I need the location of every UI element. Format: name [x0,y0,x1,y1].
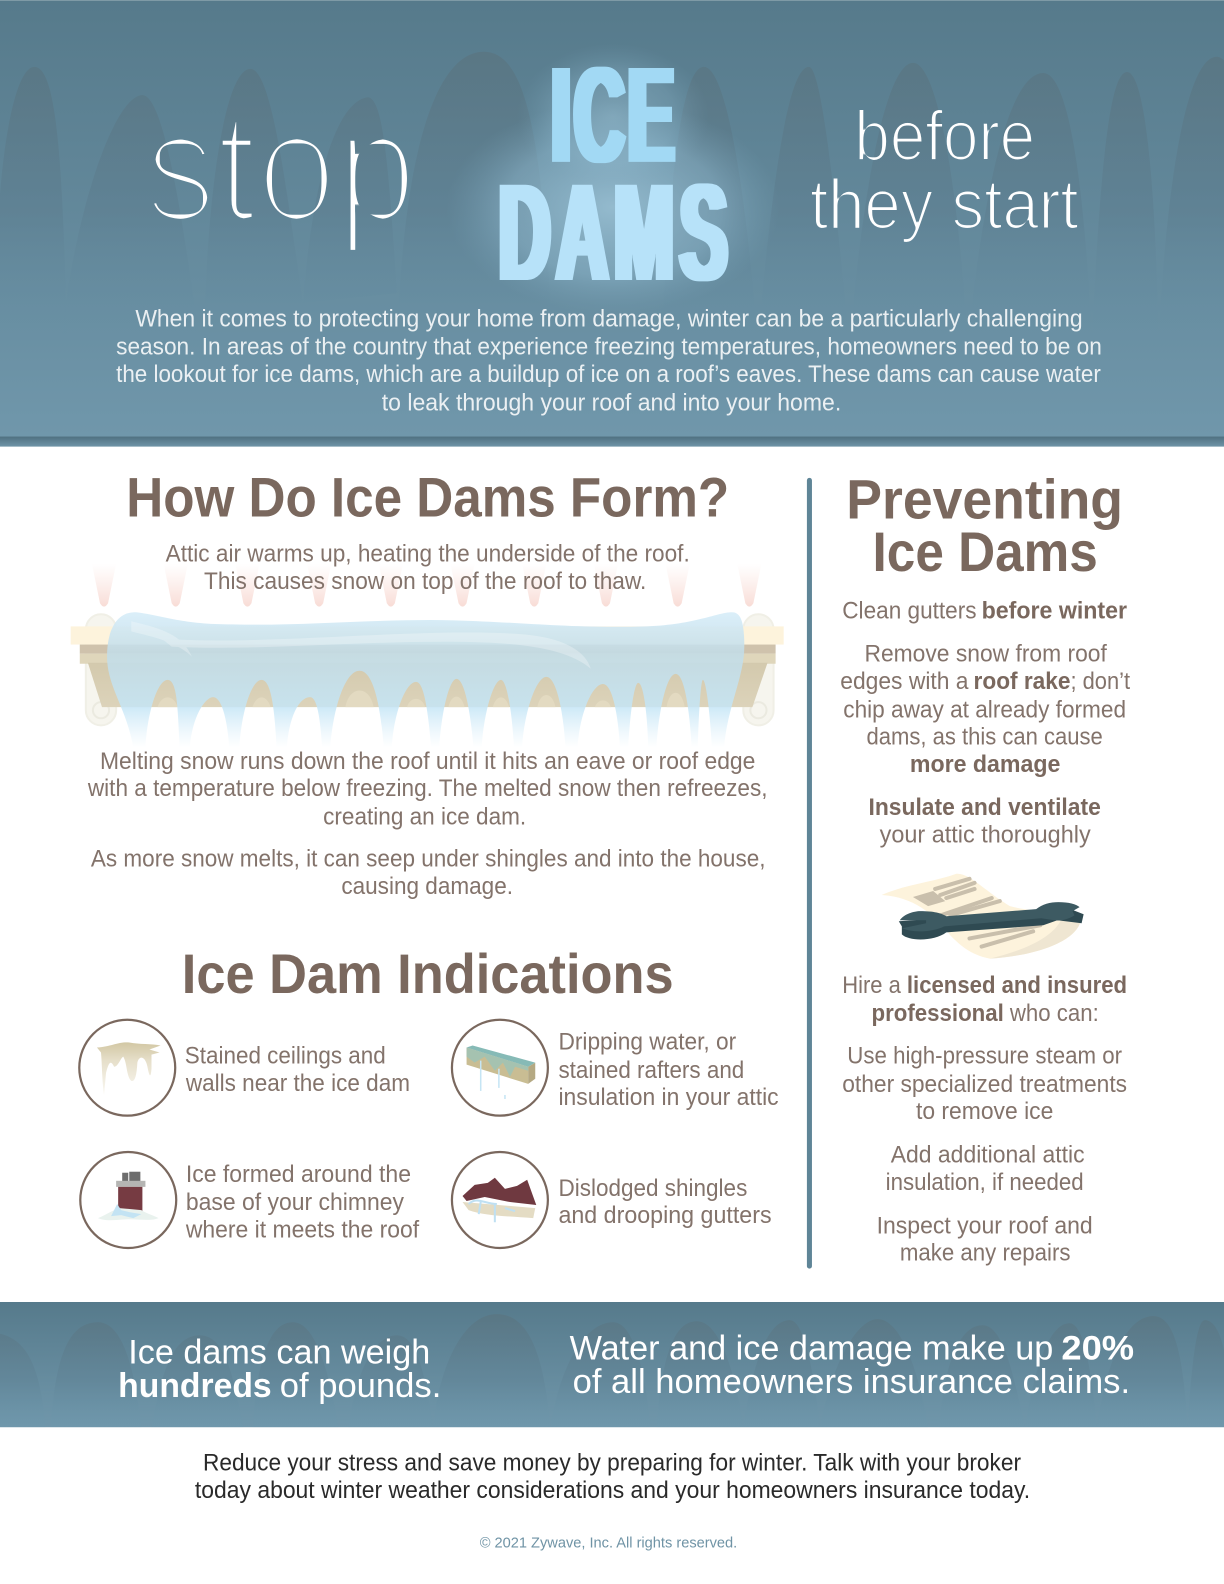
text: Dripping water, or [558,1029,736,1056]
heat arrows [92,564,761,607]
tip: remove snow: dams, as this can cause [866,724,1103,751]
tip: hire professional [842,972,1127,1027]
text: attic air: Attic air warms up, heating the underside of the roof. [166,541,690,568]
tip: insulate [869,794,1101,848]
tip: remove snow: chip away at already formed [843,696,1126,723]
stat: weight of ice dams: Ice dams can weigh [128,1334,430,1372]
stat: insurance claims [570,1330,1134,1401]
text [558,1175,772,1229]
text [558,1029,779,1111]
panel: header banner [0,0,1224,447]
stat: insurance claims: 20% [1061,1330,1134,1368]
tip: steam treatments [842,1043,1127,1125]
icon: wrench on paper [882,874,1084,959]
inner arches on the fascia [158,691,685,707]
intro text [116,305,1102,416]
text: Dislodged shingles [558,1175,747,1202]
tip: clean gutters: before winter [982,597,1128,624]
glow behind title [446,101,780,313]
title: ice dams: DAMS [499,156,734,310]
intro text: to leak through your roof and into your home. [382,389,841,416]
heading: ice dam indications: Ice Dam Indications [182,943,674,1005]
text: attic air [166,541,690,595]
stat: weight of ice dams: hundreds [118,1367,272,1405]
tip: hire professional: licensed and insured [907,972,1127,999]
text: and drooping gutters [558,1202,772,1229]
text: melting snow: Melting snow runs down the roof until it hits an eave or roof edge [100,748,755,775]
icicle background pattern [0,52,1224,344]
text: where it meets the roof [185,1216,419,1243]
title: before they start [810,96,1079,243]
heading: preventing ice dams: Ice Dams [873,521,1098,583]
icon: wet rafter [452,1020,548,1116]
tip: hire professional: professional [872,1000,1004,1027]
intro text: When it comes to protecting your home from damage, winter can be a particularly challenging [135,305,1083,332]
tip: steam treatments: to remove ice [916,1098,1053,1125]
icon: damaged roof [452,1152,548,1248]
illustration: roof with ice dam [71,564,784,748]
closing call to action: Reduce your stress and save money by preparing for winter. Talk with your broker [203,1450,1021,1477]
tip: steam treatments: Use high-pressure steam or [847,1043,1122,1070]
tip: remove snow: ; don’t [1070,668,1130,695]
text: melting snow [87,748,768,830]
ice and snow mass [107,612,744,748]
text [185,1043,410,1097]
tip: inspect roof: Inspect your roof and [877,1212,1093,1239]
intro text: the lookout for ice dams, which are a buildup of ice on a roof’s eaves. These dams can cause water [116,361,1101,388]
text: melting snow: creating an ice dam. [323,803,526,830]
title: before they start: they start [810,164,1079,243]
icicle band pattern [0,1314,1224,1427]
tip: remove snow: roof rake [974,668,1070,695]
text: base of your chimney [186,1189,405,1216]
text: attic air: This causes snow on top of the roof to thaw. [204,568,646,595]
roof boards [71,626,784,645]
tip: hire professional: who can: [1009,1000,1099,1027]
text: stained rafters and [558,1057,744,1084]
title: before they start: before [854,96,1035,175]
tip: attic insulation: insulation, if needed [886,1169,1084,1196]
tip: steam treatments: other specialized treatments [842,1071,1127,1098]
heading: how do ice dams form: How Do Ice Dams Form? [126,466,729,528]
text [185,1161,419,1243]
indication: dislodged shingles [452,1152,772,1248]
text: Stained ceilings and [185,1043,386,1070]
closing call to action [195,1450,1030,1504]
tip: attic insulation [886,1142,1085,1196]
intro text: season. In areas of the country that experience freezing temperatures, homeowners need to be on [116,334,1102,361]
indication: stained ceilings [79,1020,410,1116]
stat: weight of ice dams [118,1334,441,1405]
icon: ceiling stain [79,1020,175,1116]
icon: chimney [80,1152,176,1248]
stat: weight of ice dams: of pounds. [280,1367,441,1405]
tip: insulate: Insulate and ventilate [869,794,1101,821]
text: seepage [91,846,766,900]
title: ice dams [499,38,734,310]
indication: dripping water [452,1020,779,1116]
tip: remove snow: edges with a [840,668,969,695]
corner brackets [86,614,774,725]
tip: remove snow: more damage [910,751,1060,778]
tip: insulate: your attic thoroughly [880,821,1092,848]
indication: chimney ice [80,1152,419,1248]
text: melting snow: with a temperature below freezing. The melted snow then refreezes, [87,775,768,802]
tip: attic insulation: Add additional attic [891,1142,1085,1169]
heading: preventing ice dams: Preventing [846,468,1123,530]
tip: remove snow [840,641,1130,778]
stat: insurance claims: Water and ice damage make up [570,1330,1053,1368]
tip: clean gutters: Clean gutters [842,597,977,624]
tip: hire professional: Hire a [842,972,901,999]
stat: insurance claims: of all homeowners insurance claims. [573,1363,1130,1401]
text: Ice formed around the [186,1161,411,1188]
copyright: © 2021 Zywave, Inc. All rights reserved. [480,1534,737,1551]
title: stop: stop [144,79,417,254]
tip: inspect roof [877,1212,1093,1267]
snow highlights [131,621,591,669]
text: seepage: causing damage. [341,873,513,900]
tip: inspect roof: make any repairs [900,1240,1070,1267]
title: ice dams: ICE [551,38,678,191]
text: walls near the ice dam [185,1070,410,1097]
vertical divider [807,478,812,1269]
closing call to action: today about winter weather considerations and your homeowners insurance today. [195,1477,1030,1504]
text: insulation in your attic [558,1084,779,1111]
text: seepage: As more snow melts, it can seep under shingles and into the house, [91,846,766,873]
tip: remove snow: Remove snow from roof [864,641,1107,668]
heading: preventing ice dams [846,468,1123,583]
panel: statistics band [0,1302,1224,1427]
